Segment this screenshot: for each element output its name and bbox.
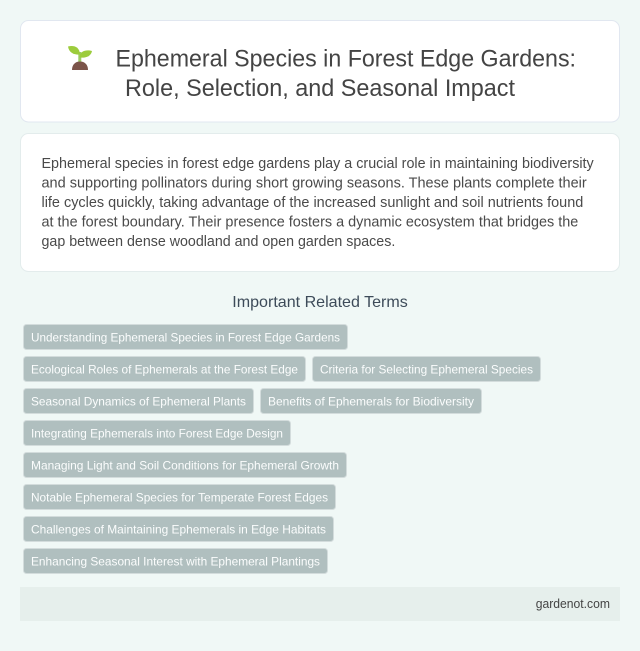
tag list [24,324,540,574]
icon: seedling [68,46,92,70]
title: Ephemeral Species in Forest Edge Gardens: [116,46,576,73]
tag: Notable Ephemeral Species for Temperate Forest Edges [31,490,328,504]
tag: Understanding Ephemeral Species in Forest Edge Gardens [31,330,340,344]
tag: Benefits of Ephemerals for Biodiversity [268,394,474,408]
tag [24,356,306,382]
tag [24,452,346,478]
tag [24,324,348,350]
footer bar [20,587,620,621]
text block: description: and supporting pollinators during short growing seasons. These plants complete their [42,176,587,192]
text block: description: Ephemeral species in forest edge gardens play a crucial role in maintaining biodiversity [42,156,594,172]
text block: description: life cycles quickly, taking advantage of the increased sunlight and soil nutrients found [42,195,583,211]
text block: description: at the forest boundary. Their presence fosters a dynamic ecosystem that bridges the [42,214,578,230]
tag: Criteria for Selecting Ephemeral Species [320,362,533,376]
heading: important related terms: Important Related Terms [232,294,408,311]
tag [24,484,336,510]
tag [312,356,540,382]
tag [24,516,334,542]
footer text: site name: gardenot.com [536,596,610,611]
tag: Enhancing Seasonal Interest with Ephemeral Plantings [31,554,320,568]
tag: Challenges of Maintaining Ephemerals in Edge Habitats [31,522,326,536]
tag: Integrating Ephemerals into Forest Edge Design [31,426,283,440]
text block: description: gap between dense woodland and open garden spaces. [42,234,395,250]
title [116,46,576,102]
tag [24,548,328,574]
tag: Managing Light and Soil Conditions for Ephemeral Growth [31,458,339,472]
panel: header card [20,20,620,122]
panel: description card [20,134,620,272]
tag: Ecological Roles of Ephemerals at the Forest Edge [31,362,298,376]
tag [24,388,254,414]
tag: Seasonal Dynamics of Ephemeral Plants [31,394,246,408]
title: Role, Selection, and Seasonal Impact [125,75,515,102]
tag [260,388,482,414]
text block: description [42,156,594,250]
tag [24,420,290,446]
